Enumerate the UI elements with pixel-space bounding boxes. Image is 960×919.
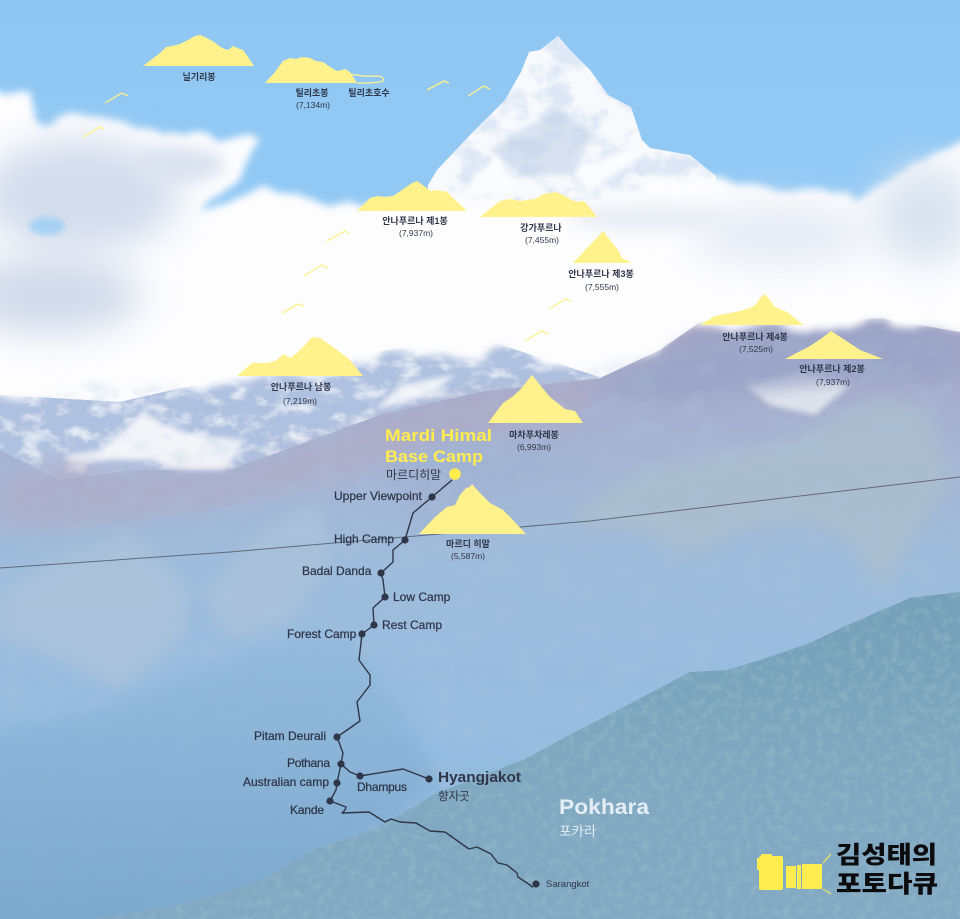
peak: Machapuchare: 마차푸차레봉 <box>509 429 559 440</box>
stop labels: Sarangkot <box>546 879 590 890</box>
peak: Mardi Himal: 마르디 히말 <box>446 538 491 549</box>
peak: Nilgiri <box>143 35 254 82</box>
peak: Tilicho and lake: 틸리초호수 <box>348 87 390 98</box>
logo <box>757 835 938 899</box>
peak: Machapuchare <box>488 375 583 452</box>
stop labels <box>243 489 590 890</box>
icon: camera <box>757 854 831 894</box>
stop labels: Upper Viewpoint <box>334 489 422 503</box>
stop labels: Forest Camp <box>287 627 357 641</box>
stop labels: Pitam Deurali <box>254 729 326 743</box>
peak: Mardi Himal <box>419 484 526 561</box>
route stops <box>326 493 540 888</box>
peak: Annapurna III: (7,555m) <box>585 282 619 292</box>
peak: Annapurna South <box>237 337 363 406</box>
stop labels: Kande <box>290 803 324 817</box>
birds <box>83 81 571 341</box>
title: Mardi Himal Base Camp: 마르디히말 <box>386 468 441 482</box>
background: Machapuchare mountain <box>428 36 716 208</box>
peak: Nilgiri: 닐기리봉 <box>182 71 216 82</box>
label: Hyangjakot: Hyangjakot <box>438 769 521 786</box>
peak: Annapurna II: 안나푸르나 제2봉 <box>799 363 865 374</box>
peak: Annapurna III: 안나푸르나 제3봉 <box>568 268 634 279</box>
label: Pokhara: Pokhara <box>559 796 649 819</box>
stop labels: Rest Camp <box>382 618 442 632</box>
destination marker <box>449 468 461 480</box>
label: Pokhara <box>559 796 649 839</box>
title: Mardi Himal Base Camp: Base Camp <box>385 447 483 466</box>
peak: Mardi Himal: (5,587m) <box>451 551 485 561</box>
label: Pokhara: 포카라 <box>559 824 597 839</box>
peak: Machapuchare: (6,993m) <box>517 442 551 452</box>
peak: Annapurna South: 안나푸르나 남봉 <box>271 381 331 392</box>
peak: Tilicho and lake <box>265 57 390 110</box>
peak: Annapurna III <box>568 231 634 292</box>
peak: Annapurna South: (7,219m) <box>283 396 317 406</box>
peak: Annapurna I: 안나푸르나 제1봉 <box>382 215 448 226</box>
peak: Annapurna IV: (7,525m) <box>739 344 773 354</box>
background: distant mountains and valley <box>0 318 960 919</box>
stop labels: High Camp <box>334 532 394 546</box>
stop labels: Low Camp <box>393 590 451 604</box>
peak: Gangapurna <box>480 192 597 245</box>
peak: Gangapurna: 강가푸르나 <box>520 222 562 233</box>
stop labels: Dhampus <box>357 780 407 794</box>
logo text <box>836 835 938 899</box>
background: white haze behind ridges <box>0 240 960 410</box>
peak: Tilicho and lake: 틸리초봉 <box>295 87 329 98</box>
peak: Annapurna IV <box>700 294 803 354</box>
background: front green hill <box>90 590 960 919</box>
stop labels: Badal Danda <box>302 564 372 578</box>
peak: Annapurna II: (7,937m) <box>816 377 850 387</box>
background: clouds <box>0 87 960 393</box>
label: Hyangjakot: 향자곳 <box>438 790 470 803</box>
peak: Annapurna IV: 안나푸르나 제4봉 <box>722 331 788 342</box>
title: Mardi Himal Base Camp: Mardi Himal <box>385 426 492 445</box>
title: Mardi Himal Base Camp <box>385 426 492 482</box>
peak: Tilicho and lake: (7,134m) <box>296 100 330 110</box>
logo text: 김성태의 <box>836 835 937 870</box>
peak: Annapurna I <box>357 181 467 238</box>
stop labels: Pothana <box>287 756 330 770</box>
power line <box>0 477 960 568</box>
peak: Gangapurna: (7,455m) <box>525 235 559 245</box>
route line <box>330 480 536 887</box>
label: Hyangjakot <box>438 769 521 803</box>
peak: Annapurna I: (7,937m) <box>399 228 433 238</box>
stop labels: Australian camp <box>243 775 329 789</box>
peak: Annapurna II <box>785 331 883 387</box>
logo text: 포토다큐 <box>836 864 938 899</box>
